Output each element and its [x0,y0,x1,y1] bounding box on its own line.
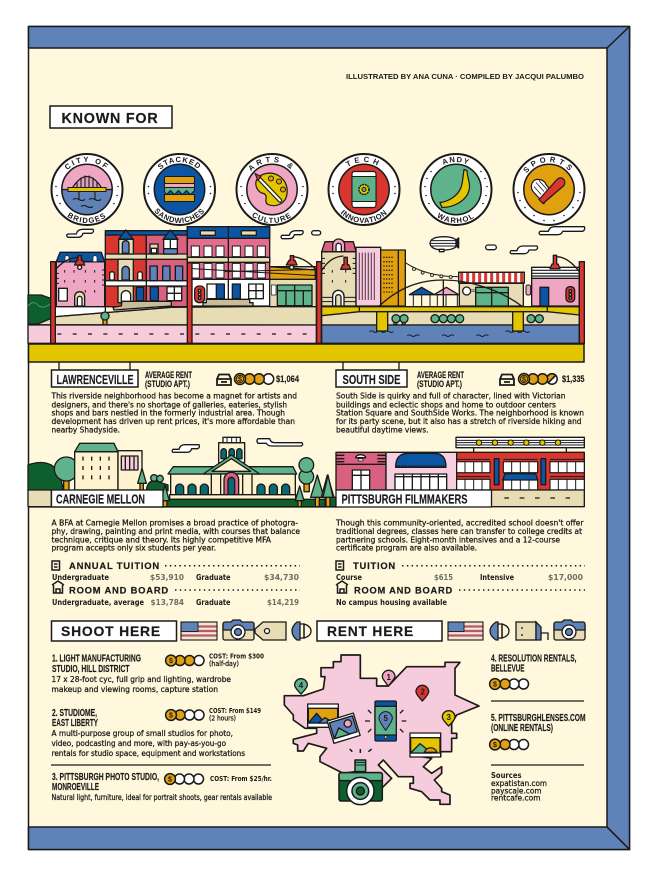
pink tower [356,247,381,306]
heading: known for [50,106,172,128]
dotted leader [402,565,585,567]
listing 5: Pittsburghlenses.com [490,712,586,750]
heading: tuition: TUITION [353,561,396,572]
listing 2: Studiome: $ [169,712,173,720]
listing 2: Studiome: EAST LIBERTY [52,717,98,729]
phone signal ticks [365,710,406,732]
divider [491,764,584,766]
badge: arts and culture [236,153,308,226]
hanging sign: Lawrenceville [52,362,399,387]
note: no housing: No campus housing available [336,598,447,607]
badge: tech innovation: INNOVATION [340,210,387,224]
text: Carnegie Mellon description: technique, critique and theory. Its highly competitive MFA [52,535,271,544]
listing 3: Pittsburgh Photo Studio: Natural light, furniture, ideal for portrait shoots, gear rentals available [52,793,272,802]
listing 1: Light Manufacturing: (half-day) [209,660,239,668]
icon: rent house left [217,374,231,385]
map of Pittsburgh [284,655,479,805]
traffic sign [195,286,205,303]
tan sidewalk [491,490,584,507]
badge: city of bridges: BRIDGES [67,212,106,223]
hanging sign: Lawrenceville: LAWRENCEVILLE [56,372,134,387]
blimp and clouds [430,227,585,254]
pin 3 [442,711,455,726]
pin 4 [295,679,307,694]
dotted leader [165,565,300,567]
listing 1: Light Manufacturing: STUDIO, HILL DISTRICT [52,663,130,675]
listing 1: Light Manufacturing: $ [169,658,173,665]
dotted leader [459,589,585,591]
waves [369,331,530,336]
coin symbol: $ [522,376,526,384]
icon: tag [255,622,286,640]
icon: lens box [516,622,548,640]
average rent label right [417,370,464,389]
main hall [168,455,297,499]
red brick rowhouses [105,230,187,310]
listing 5: Pittsburghlenses.com: (ONLINE RENTALS) [491,722,553,734]
icon: lens left [292,622,311,640]
listing 4: Resolution Rentals: BELLEVUE [491,663,524,675]
bridge arch [379,280,522,306]
table: tuition right: $17,000 [548,573,583,582]
badge: tech innovation: TECH [345,156,380,166]
table: tuition right: $615 [434,573,453,582]
text: Filmmakers description: certificate program are also available. [336,544,477,553]
listing 2: Studiome: 2. STUDIOME, [52,707,97,719]
average rent label left: AVERAGE RENT [145,370,192,380]
overhead wires [55,268,316,317]
poles [51,262,321,343]
text: South Side description: Station Square and SouthSide Works. The neighborhood is known [336,409,584,418]
divider [51,764,271,766]
listing 4: Resolution Rentals: 4. RESOLUTION RENTALS, [491,653,577,665]
market stall [459,272,524,306]
average rent label left: (STUDIO APT.) [145,379,190,389]
badge: city of bridges [50,153,124,226]
bridge piers [377,312,523,331]
table: tuition left: Graduate [196,573,231,582]
string lights [405,263,458,278]
badge: andy warhol: ANDY [443,156,470,165]
listing 4: Resolution Rentals [490,653,577,689]
pin 1 [382,670,395,686]
badge: stacked sandwiches: SANDWICHES [154,208,204,224]
text: Lawrenceville description: development has driven up rent prices, it's more affordable than [52,417,295,426]
icon: tuition left [52,561,60,570]
hanging sign: South Side [336,370,407,387]
badge: andy warhol: WARHOL [438,212,474,223]
icon: camera right [554,620,585,640]
map outline [284,655,479,804]
heading: shoot here [52,621,176,641]
red commercial block [457,452,584,490]
pin 4: 4 [299,681,304,690]
sources [491,771,547,803]
listing 1: Light Manufacturing: 17 x 28-foot cyc, full grip and lighting, wardrobe [52,675,231,684]
text: Carnegie Mellon description: A BFA at Carnegie Mellon promises a broad practice of photogra- [52,519,298,528]
heading: known for: KNOWN FOR [62,111,158,127]
text: South Side description: buildings and eclectic shops and home to outdoor centers [336,400,556,409]
listing 2: Studiome: A multi-purpose group of small studios for photo, [52,729,233,738]
illustration: Carnegie Mellon campus [28,437,336,507]
listing 1: Light Manufacturing: makeup and viewing rooms, capture station [52,685,218,694]
lamp on tan building [322,256,351,271]
table: tuition right [336,573,583,582]
yellow pavement band [28,344,584,362]
listing 2: Studiome [52,707,261,758]
photo 3 [410,733,441,757]
heading: room and board left: ROOM AND BOARD [69,586,169,597]
icon: room and board left [52,581,64,593]
text: Carnegie Mellon description: phy, drawing, painting and print media, with courses that balance [52,527,300,536]
text: South Side description: for its party scene, but it also has a stretch of riverside hiking and [336,417,582,426]
badge: sports [512,153,586,226]
tan church building [322,239,356,306]
listing 2: Studiome: COST: From $149 [209,707,261,715]
street lamps [55,256,316,270]
table: tuition left [52,573,299,582]
table: room and board left [52,598,299,607]
photo 1 [308,704,338,727]
phone with pin 5 [375,701,396,741]
clouds [172,439,303,452]
listing 3: Pittsburgh Photo Studio: $ [168,776,172,784]
listing 3: Pittsburgh Photo Studio [52,771,272,802]
icon: camera left [223,620,254,640]
badge: andy warhol [420,153,492,226]
billboard [456,437,584,452]
table: tuition left: $53,910 [150,573,184,582]
table: tuition left: $34,730 [264,573,299,582]
text: Lawrenceville description: shops and bars nestled in the formerly industrial area. Though [52,409,285,418]
heading: shoot here: SHOOT HERE [61,623,161,639]
rose building [336,452,386,490]
listing 2: Studiome: (2 hours) [209,715,236,723]
baseline [28,506,336,508]
badge: sports: SPORTS [524,156,572,172]
text: Filmmakers description: traditional degrees, classes here can transfer to college credits at [336,527,582,536]
umbrellas [409,287,459,306]
pin 2: 2 [420,688,425,697]
right pole [579,262,584,343]
label: Pittsburgh Filmmakers: PITTSBURGH FILMMAKERS [342,492,468,506]
sign [526,285,531,295]
small tree [323,475,336,507]
sources: Sources [491,771,522,780]
pink house [56,252,105,307]
heading: annual tuition: ANNUAL TUITION [69,561,160,572]
text: Filmmakers description [335,519,584,553]
badge: city of bridges: CITY OF [65,156,108,169]
hanging sign: South Side: SOUTH SIDE [342,372,401,387]
rent price left: $1,064 [276,374,300,385]
sources: payscale.com [491,786,542,795]
illustration: South Side streetscape [322,227,585,343]
badge: arts and culture: CULTURE [252,212,292,223]
pink corner building [532,255,579,306]
rent coins left [234,374,274,384]
listing 2: Studiome: rentals for studio space, equipment and workstations [52,749,245,758]
ground [36,306,316,325]
average rent label left [145,370,192,389]
badge: arts and culture: ARTS & [249,156,292,172]
divider [491,700,584,702]
icon: lens right [490,622,509,640]
storefront with green doors [270,267,316,307]
hill [28,295,51,324]
text: Lawrenceville description: This riverside neighborhood has become a magnet for artists and [51,392,297,401]
table: tuition right: Intensive [480,573,514,582]
central clock tower [219,437,245,463]
table: tuition right: Course [336,573,362,582]
badge: stacked sandwiches: STACKED [158,156,200,169]
listing 3: Pittsburgh Photo Studio: 3. PITTSBURGH PHOTO STUDIO, [52,771,159,783]
credit line: ILLUSTRATED BY ANA CUNA · COMPILED BY JACQUI PALUMBO [346,72,584,81]
table: room and board left: $14,219 [267,598,299,607]
table: room and board left: Graduate [196,598,231,607]
listing 3: Pittsburgh Photo Studio: MONROEVILLE [52,781,99,793]
right trees [161,458,334,507]
water [322,325,579,343]
sources: rentcafe.com [491,794,541,803]
listing 1: Light Manufacturing: 1. LIGHT MANUFACTURING [52,653,141,665]
text: Carnegie Mellon description: program accepts only six students per year. [52,544,216,553]
text: Lawrenceville description: designers, and there's no shortage of galleries, eateries, stylish [52,400,287,409]
icon: room and board right [336,581,348,593]
listing 1: Light Manufacturing [52,653,264,694]
tan ground [28,490,51,507]
text: Lawrenceville description: nearby Shadyside. [52,426,120,435]
illustration: Pittsburgh Filmmakers [323,437,584,507]
label: Carnegie Mellon: CARNEGIE MELLON [56,492,145,506]
pin 2 [416,685,429,701]
text: South Side description [336,392,584,435]
badge: tech innovation [328,153,400,226]
average rent label right: (STUDIO APT.) [417,379,462,389]
tree [101,312,109,325]
pink awning building [386,452,457,490]
blue-topped apartment blocks [187,227,270,306]
small trees [138,468,168,491]
table: room and board left: $13,784 [150,598,184,607]
road [28,325,316,343]
average rent label right: AVERAGE RENT [417,370,464,380]
listing 2: Studiome: video, podcasting and more, with pay-as-you-go [52,739,226,748]
pin 5 number: 5 [383,714,388,723]
pin 1: 1 [386,673,391,682]
icon: rent house right [500,374,514,385]
listing 4: Resolution Rentals: $ [493,682,497,688]
heading: rent here [317,621,442,641]
clouds [67,229,321,239]
campus tower building [75,443,142,490]
dark hill and trees [28,457,78,491]
heading: rent here: RENT HERE [327,623,414,639]
heading: room and board right: ROOM AND BOARD [354,586,453,597]
badge: stacked sandwiches [143,153,216,226]
coin symbol: $ [238,376,242,384]
rent price right: $1,335 [562,374,585,385]
dotted leader [175,589,300,591]
text: Lawrenceville description [51,392,297,435]
round trees [392,315,543,325]
bridge deck [322,307,579,316]
rent coins right [518,374,557,384]
pin 3: 3 [446,713,451,722]
text: Carnegie Mellon description [52,519,300,553]
orange tower [381,250,405,306]
camera [339,749,382,805]
campus base [166,499,336,507]
listing 1: Light Manufacturing: COST: From $300 [209,653,264,661]
text: Filmmakers description: Though this community-oriented, accredited school doesn't offer [335,519,584,528]
sources: expatistan.com [491,779,547,788]
illustration: Lawrenceville streetscape [28,227,321,343]
text: South Side description: beautiful daytime views. [336,426,428,435]
listing 5: Pittsburghlenses.com: 5. PITTSBURGHLENSES.COM [491,712,586,724]
icon: tuition right [336,561,344,570]
icon: flag right [448,622,483,640]
text: Filmmakers description: partnering schools. Eight-month intensives and a 12-course [336,535,560,544]
listing 3: Pittsburgh Photo Studio: COST: From $25/hr. [210,775,272,783]
listing 5: Pittsburghlenses.com: $ [493,742,497,749]
icon: flag left [181,622,217,640]
table: tuition left: Undergraduate [52,573,109,582]
table: room and board left: Undergraduate, average [52,598,144,607]
photo 2 [327,713,360,743]
riverbank [322,311,579,325]
text: South Side description: South Side is quirky and full of character, lined with Victorian [336,392,566,401]
